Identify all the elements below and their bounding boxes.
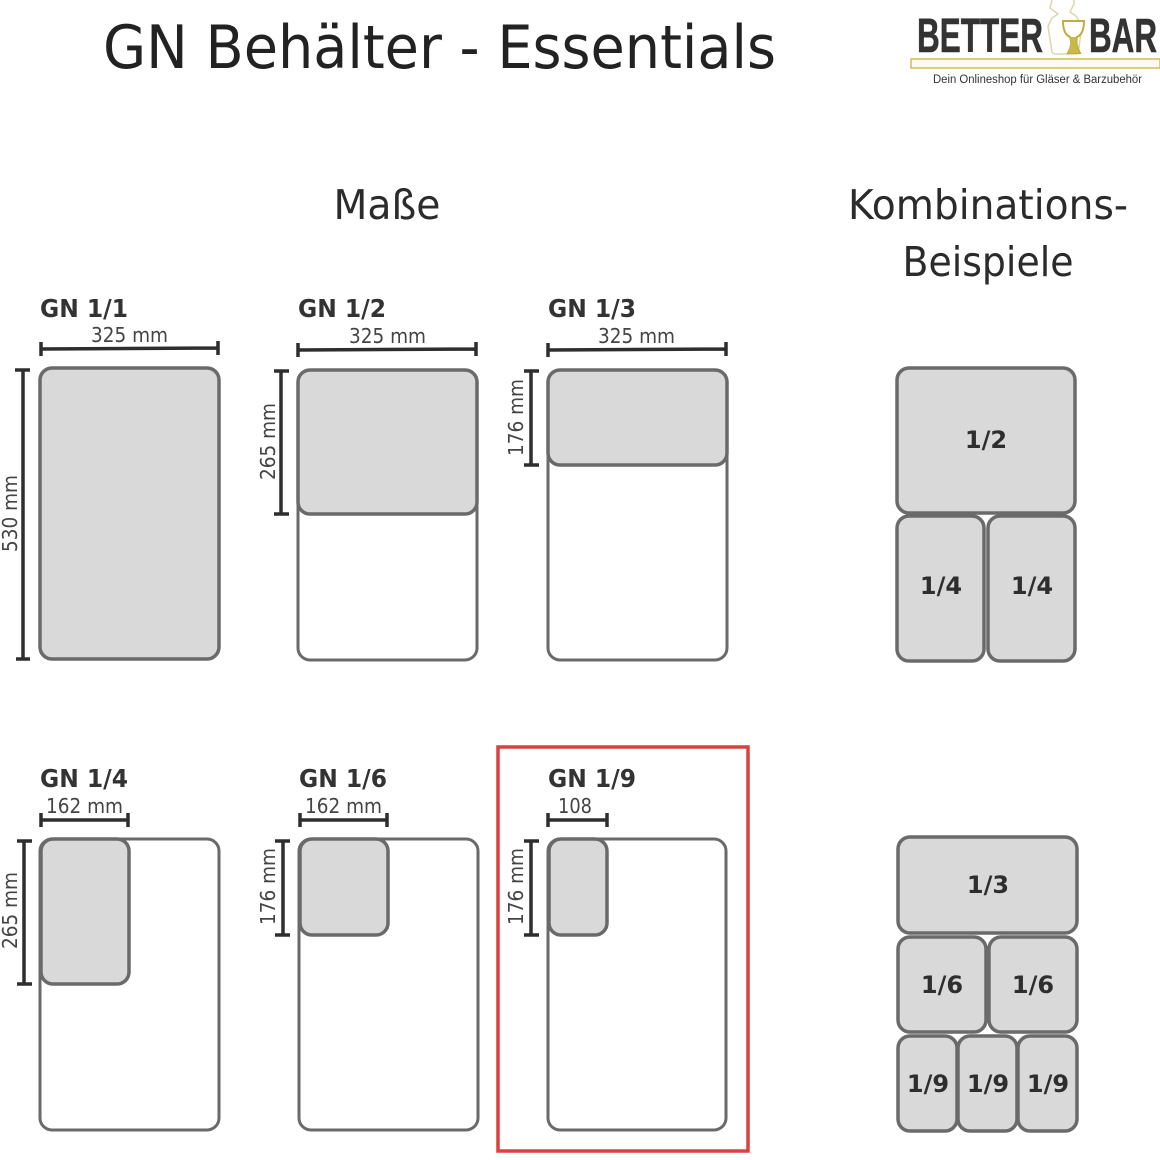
logo wordmark: BETTER: [917, 10, 1043, 63]
panel: GN 1/6: 162 mm: [305, 794, 382, 818]
panel: GN 1/2: [256, 294, 477, 660]
heading: Kombinations-Beispiele: Beispiele: [902, 238, 1074, 286]
panel: GN 1/1: GN 1/1: [40, 294, 128, 323]
panel: GN 1/1: 325 mm: [91, 323, 168, 347]
panel: GN 1/4: 162 mm: [46, 794, 123, 818]
combination example: 1/3 + 1/6 + 1/6 + 1/9 x3: 1/9: [907, 1070, 949, 1098]
combination example: 1/2 + 1/4 + 1/4: [897, 368, 1075, 661]
panel: GN 1/9: [504, 764, 726, 1130]
combination example: 1/3 + 1/6 + 1/6 + 1/9 x3: 1/9: [1027, 1070, 1069, 1098]
logo tagline: Dein Onlineshop für Gläser & Barzubehör: [933, 74, 1142, 86]
combination example: 1/2 + 1/4 + 1/4: 1/4: [1011, 572, 1053, 600]
panel: GN 1/4: GN 1/4: [40, 764, 128, 793]
panel: GN 1/9: GN 1/9: [548, 764, 636, 793]
combination example: 1/3 + 1/6 + 1/6 + 1/9 x3: 1/9: [967, 1070, 1009, 1098]
combination example: 1/3 + 1/6 + 1/6 + 1/9 x3: [898, 837, 1077, 1131]
heading: Kombinations-Beispiele: Kombinations-: [848, 181, 1128, 229]
panel: GN 1/3: GN 1/3: [548, 294, 636, 323]
panel: GN 1/9: 108: [558, 794, 592, 818]
panel: GN 1/6: [256, 764, 478, 1130]
panel: GN 1/3: 176 mm: [504, 379, 528, 456]
combination example: 1/2 + 1/4 + 1/4: 1/2: [965, 426, 1007, 454]
highlight frame: GN 1/9: [498, 747, 748, 1151]
combination example: 1/3 + 1/6 + 1/6 + 1/9 x3: 1/6: [921, 971, 963, 999]
panel: GN 1/9: 176 mm: [504, 848, 528, 925]
combination example: 1/3 + 1/6 + 1/6 + 1/9 x3: 1/6: [1012, 971, 1054, 999]
panel: GN 1/2: GN 1/2: [298, 294, 386, 323]
panel: GN 1/2: 325 mm: [349, 324, 426, 348]
title: GN Behälter - Essentials: [103, 13, 776, 83]
panel: GN 1/3: [504, 294, 727, 660]
heading: Maße: Maße: [334, 181, 440, 229]
panel: GN 1/2: 265 mm: [256, 403, 280, 480]
logo shelf: [911, 59, 1160, 68]
panel: GN 1/6: 176 mm: [256, 848, 280, 925]
combination example: 1/2 + 1/4 + 1/4: 1/4: [920, 572, 962, 600]
logo: Better Bar: [911, 0, 1160, 86]
logo shaker and glass icon: [1048, 0, 1084, 54]
panel: GN 1/6: GN 1/6: [299, 764, 387, 793]
panel: GN 1/4: [0, 764, 219, 1130]
panel: GN 1/1: [0, 294, 219, 659]
panel: GN 1/3: 325 mm: [598, 324, 675, 348]
combination example: 1/3 + 1/6 + 1/6 + 1/9 x3: 1/3: [967, 871, 1009, 899]
heading: Kombinations-Beispiele: [848, 181, 1128, 286]
